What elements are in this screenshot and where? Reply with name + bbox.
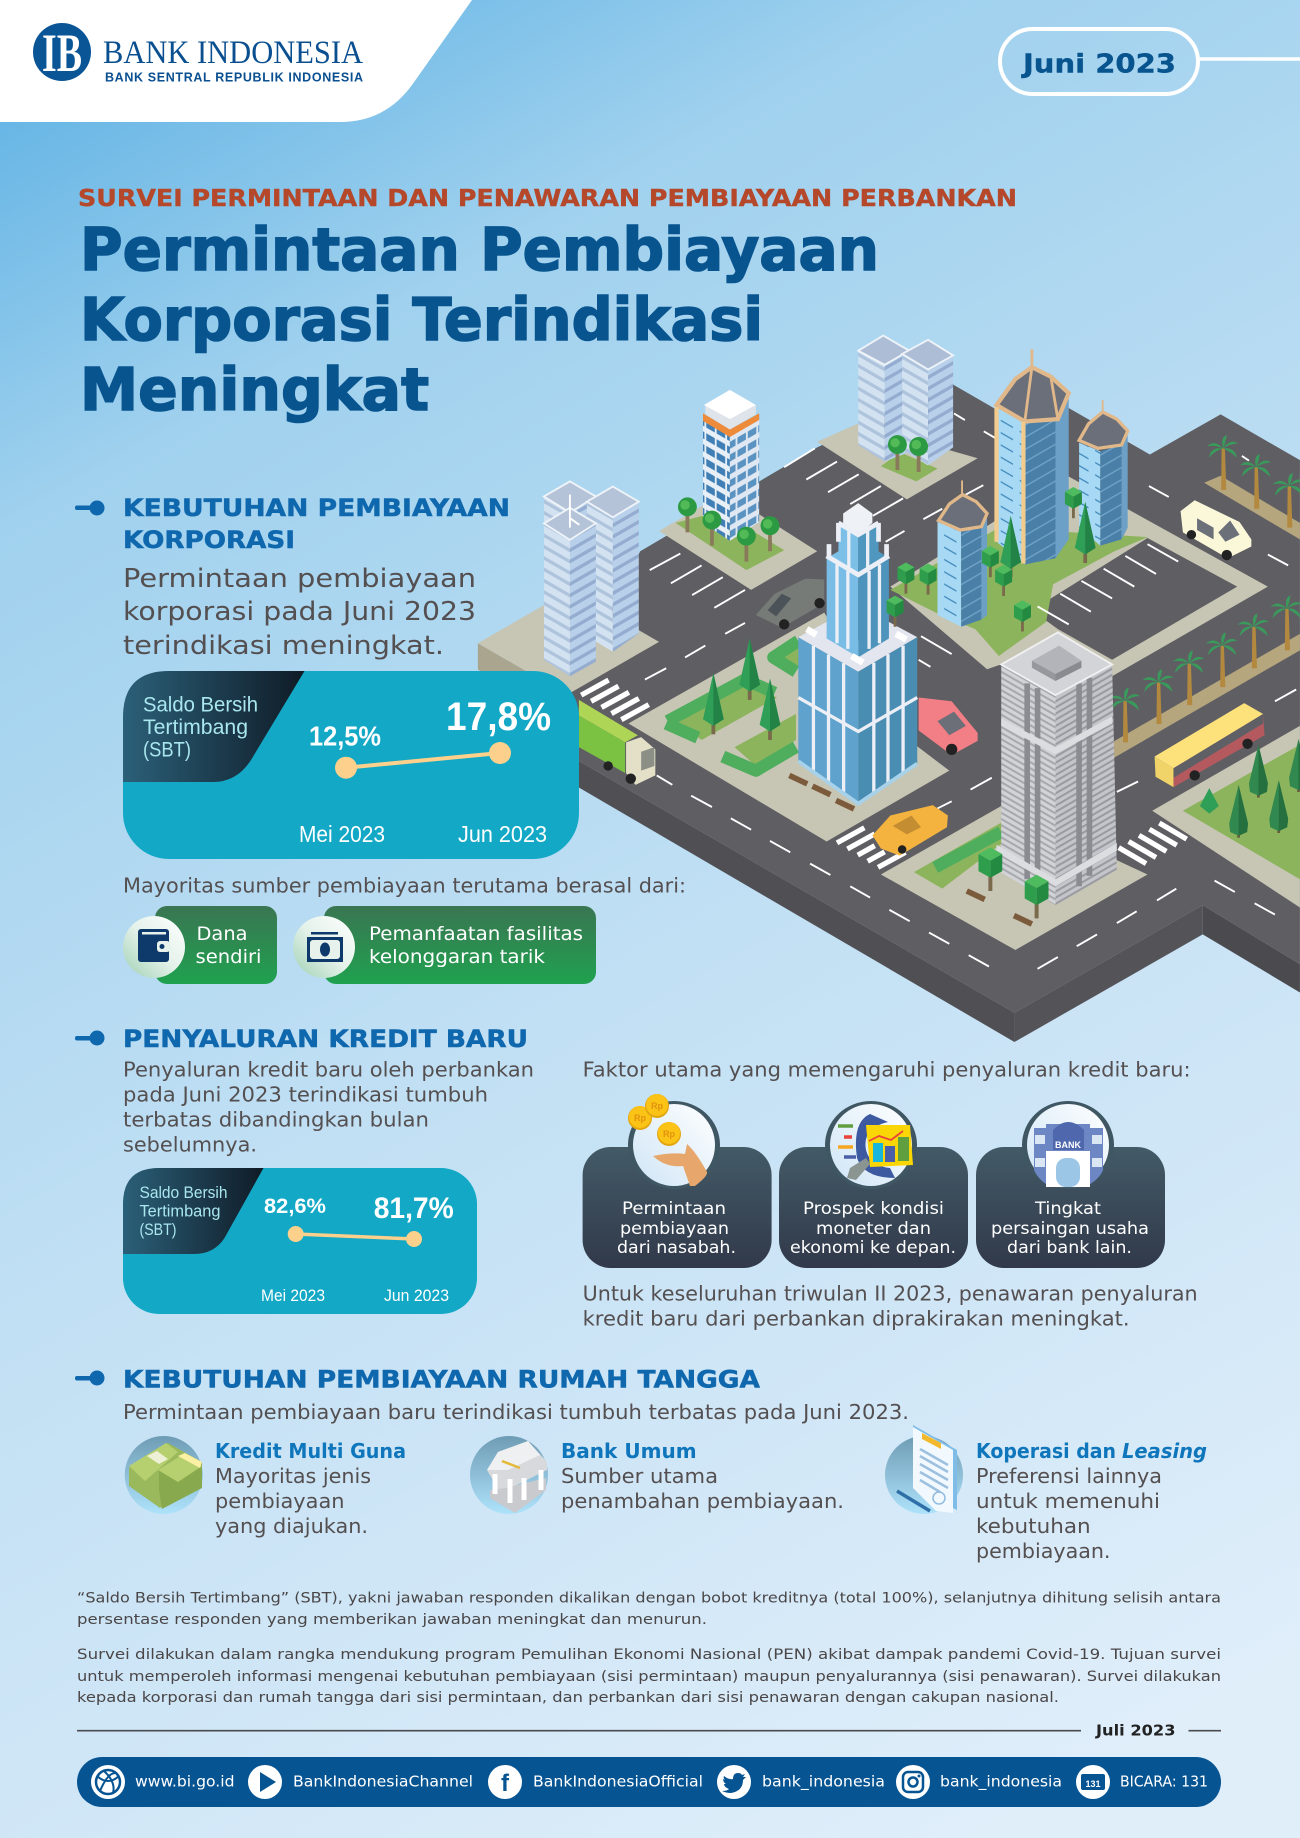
icon: magnifier with chart xyxy=(838,1114,913,1180)
card: tingkat persaingan: dari bank lain. xyxy=(1007,1238,1132,1258)
icon: coins and hand: Rp xyxy=(663,1129,675,1139)
date badge xyxy=(1000,29,1300,94)
section intro text: Permintaan pembiayaan baru terindikasi tumbuh terbatas pada Juni 2023. xyxy=(123,1400,909,1424)
vehicle: bus xyxy=(1155,703,1265,787)
section heading: KEBUTUHAN PEMBIAYAAN xyxy=(123,494,510,522)
factors heading: Faktor utama yang memengaruhi penyaluran kredit baru: xyxy=(583,1058,1191,1082)
panel: SBT corporate chart xyxy=(123,671,579,859)
section heading: KORPORASI xyxy=(123,526,295,554)
hedges xyxy=(666,641,1001,867)
card: permintaan pembiayaan: Permintaan xyxy=(622,1199,726,1219)
footer contact bar: BankIndonesiaOfficial xyxy=(533,1773,703,1791)
sources text: Mayoritas sumber pembiayaan terutama berasal dari: xyxy=(123,874,686,898)
isometric city illustration xyxy=(478,336,1300,1042)
publication date: Juli 2023 xyxy=(1095,1722,1176,1740)
icon: facebook: f xyxy=(501,1770,510,1797)
footnotes: untuk memperoleh informasi mengenai kebutuhan pembiayaan (sisi permintaan) maupun penyalurannya (sisi penawaran). Survei dilakukan xyxy=(77,1669,1221,1685)
card: tingkat persaingan: Tingkat xyxy=(1034,1199,1101,1219)
card: permintaan pembiayaan: dari nasabah. xyxy=(617,1238,736,1258)
panel: SBT credit chart xyxy=(123,1168,477,1314)
panel: SBT corporate chart: Mei 2023 xyxy=(299,821,385,847)
icon: bank building xyxy=(1034,1122,1103,1187)
building: glass tower xyxy=(798,503,917,804)
building: left twin tower xyxy=(544,481,639,676)
footer contact bar: bank_indonesia xyxy=(762,1773,885,1792)
road surface xyxy=(567,384,1300,1013)
icon: call centre xyxy=(1076,1765,1110,1799)
card: prospek kondisi: ekonomi ke depan. xyxy=(790,1238,956,1258)
panel: SBT corporate chart: 12,5% xyxy=(309,721,381,752)
card: dana sendiri xyxy=(123,906,277,984)
item: bank umum: penambahan pembiayaan. xyxy=(561,1489,844,1513)
item: bank umum: Bank Umum xyxy=(561,1439,697,1463)
section intro text: Penyaluran kredit baru oleh perbankan xyxy=(123,1058,534,1082)
item: bank umum: Sumber utama xyxy=(561,1464,718,1488)
quarterly note xyxy=(583,1282,1198,1330)
footnotes: kepada korporasi dan rumah tangga dari sisi permintaan, dan perbankan dari sisi penawaran dengan cakupan nasional. xyxy=(77,1690,1059,1706)
section intro text xyxy=(123,1058,534,1157)
footer contact bar: BankIndonesiaChannel xyxy=(293,1773,473,1791)
white logo tab xyxy=(0,0,472,122)
icon: instagram xyxy=(896,1765,930,1799)
section intro text: Permintaan pembiayaan xyxy=(123,564,476,594)
icon: coins and hand: Rp xyxy=(634,1113,646,1123)
icon: banknote xyxy=(307,932,343,962)
section bullet xyxy=(75,1370,104,1386)
section: kebutuhan pembiayaan rumah tangga xyxy=(75,1366,1207,1563)
logo emblem: IB xyxy=(42,23,82,83)
icon: coins and hand: Rp xyxy=(651,1101,663,1111)
item: koperasi dan leasing: Preferensi lainnya xyxy=(976,1464,1162,1488)
building: small gold tower right xyxy=(1079,400,1128,546)
footer contact bar: www.bi.go.id xyxy=(135,1773,234,1791)
item: bank umum xyxy=(470,1436,844,1514)
title: Meningkat xyxy=(80,355,429,424)
quarterly note: Untuk keseluruhan triwulan II 2023, penawaran penyaluran xyxy=(583,1282,1198,1306)
item: kredit multi guna: yang diajukan. xyxy=(215,1514,368,1538)
building: gray tower xyxy=(997,632,1117,905)
panel: SBT credit chart: Jun 2023 xyxy=(384,1287,449,1305)
vehicle: truck xyxy=(579,700,655,785)
icon: twitter xyxy=(717,1765,751,1799)
panel: SBT corporate chart: Tertimbang xyxy=(143,715,248,739)
kicker: SURVEI PERMINTAAN DAN PENAWARAN PEMBIAYAAN PERBANKAN xyxy=(78,186,1017,212)
lower block trees and benches xyxy=(789,775,1049,924)
trees in the city xyxy=(678,435,1300,838)
logo wordmark: BANK INDONESIA xyxy=(103,35,363,71)
footnotes: persentase responden yang memberikan jawaban meningkat dan menurun. xyxy=(77,1612,707,1628)
vehicle: red car xyxy=(919,698,978,755)
card: dana sendiri: Dana xyxy=(196,923,248,945)
panel: SBT corporate chart: Jun 2023 xyxy=(458,821,547,847)
section intro text: terbatas dibandingkan bulan xyxy=(123,1108,429,1132)
item: kredit multi guna: Kredit Multi Guna xyxy=(215,1439,406,1463)
vehicle: van xyxy=(1181,500,1251,560)
item: koperasi dan leasing: kebutuhan xyxy=(976,1514,1091,1538)
card: kelonggaran tarik: Pemanfaatan fasilitas xyxy=(369,923,583,945)
panel: SBT credit chart: (SBT) xyxy=(140,1221,176,1239)
card: prospek kondisi: moneter dan xyxy=(816,1219,931,1239)
card: tingkat persaingan xyxy=(976,1101,1165,1268)
panel: SBT credit chart: 81,7% xyxy=(374,1192,454,1225)
title: Permintaan Pembiayaan xyxy=(80,215,879,284)
footer contact bar: BICARA: 131 xyxy=(1120,1773,1208,1791)
item: koperasi dan leasing: untuk memenuhi xyxy=(976,1489,1160,1513)
date badge: Juni 2023 xyxy=(1021,50,1176,80)
section intro text: pada Juni 2023 terindikasi tumbuh xyxy=(123,1083,488,1107)
building: orange striped tower xyxy=(703,390,759,541)
footer contact bar: bank_indonesia xyxy=(940,1773,1062,1792)
icon: facebook xyxy=(488,1765,522,1799)
pavement blocks and lawns xyxy=(478,424,1300,950)
building: small gold tower left xyxy=(938,480,987,627)
item: kredit multi guna: pembiayaan xyxy=(215,1489,344,1513)
building: tall gold tower xyxy=(997,349,1069,564)
vehicle: yellow car xyxy=(872,805,948,856)
panel: SBT credit chart: Tertimbang xyxy=(140,1203,220,1221)
panel: SBT corporate chart: (SBT) xyxy=(143,738,191,762)
panel: SBT corporate chart: Saldo Bersih xyxy=(143,692,258,716)
card: dana sendiri: sendiri xyxy=(196,946,262,968)
icon: bank building: BANK xyxy=(1055,1140,1081,1150)
footnotes: “Saldo Bersih Tertimbang” (SBT), yakni jawaban responden dikalikan dengan bobot kreditnya (total 100%), selanjutnya dihitung selisih antara xyxy=(77,1591,1221,1607)
vehicle: gray car xyxy=(756,579,825,630)
section intro text xyxy=(123,564,476,661)
icon: wallet xyxy=(138,929,170,962)
logo tagline: BANK SENTRAL REPUBLIK INDONESIA xyxy=(105,70,363,84)
item: koperasi dan leasing: Koperasi dan xyxy=(976,1439,1116,1463)
ground side faces xyxy=(478,643,1300,1042)
section intro text: sebelumnya. xyxy=(123,1133,257,1157)
item: koperasi dan leasing: Leasing xyxy=(1122,1439,1207,1463)
section: kebutuhan pembiayaan korporasi xyxy=(75,494,686,984)
section heading xyxy=(123,494,510,554)
section intro text: terindikasi meningkat. xyxy=(123,631,444,661)
section heading: PENYALURAN KREDIT BARU xyxy=(123,1025,528,1053)
road markings xyxy=(645,413,1296,969)
icon: clipboard document xyxy=(897,1425,957,1513)
card: kelonggaran tarik: kelonggaran tarik xyxy=(369,946,545,968)
item: kredit multi guna: Mayoritas jenis xyxy=(215,1464,371,1488)
panel: SBT credit chart: Mei 2023 xyxy=(261,1287,325,1305)
card: permintaan pembiayaan xyxy=(583,1094,772,1268)
icon: video channel xyxy=(248,1765,282,1799)
logo: Bank Indonesia xyxy=(33,23,363,84)
section: penyaluran kredit baru xyxy=(75,1025,1198,1330)
icon: globe xyxy=(91,1765,125,1799)
card: prospek kondisi: Prospek kondisi xyxy=(803,1199,944,1219)
quarterly note: kredit baru dari perbankan diprakirakan meningkat. xyxy=(583,1306,1130,1330)
section bullet xyxy=(75,1030,104,1046)
icon: money stacks xyxy=(129,1443,202,1509)
building: top twin tower xyxy=(858,336,953,465)
icon: bank columns xyxy=(487,1441,547,1513)
section bullet xyxy=(75,500,104,516)
footer contact bar xyxy=(77,1757,1221,1807)
card: tingkat persaingan: persaingan usaha xyxy=(991,1219,1149,1239)
panel: SBT credit chart: Saldo Bersih xyxy=(140,1184,228,1202)
item: koperasi dan leasing: pembiayaan. xyxy=(976,1539,1110,1563)
title: Korporasi Terindikasi xyxy=(80,285,763,354)
panel: SBT corporate chart: 17,8% xyxy=(446,695,551,739)
footnotes xyxy=(77,1591,1221,1706)
item: koperasi dan leasing xyxy=(885,1425,1207,1563)
card: kelonggaran tarik xyxy=(293,906,596,984)
icon: call centre: 131 xyxy=(1085,1779,1101,1789)
icon: coins and hand xyxy=(628,1094,707,1186)
crosswalks xyxy=(581,680,1187,867)
section heading: KEBUTUHAN PEMBIAYAAN RUMAH TANGGA xyxy=(123,1366,760,1394)
item: kredit multi guna xyxy=(125,1436,406,1538)
section intro text: korporasi pada Juni 2023 xyxy=(123,597,476,627)
panel: SBT credit chart: 82,6% xyxy=(264,1195,326,1218)
title xyxy=(80,215,879,424)
footnotes: Survei dilakukan dalam rangka mendukung program Pemulihan Ekonomi Nasional (PEN) akibat dampak pandemi Covid-19. Tujuan survei xyxy=(77,1647,1221,1663)
card: permintaan pembiayaan: pembiayaan xyxy=(620,1219,729,1239)
card: prospek kondisi xyxy=(779,1101,968,1268)
